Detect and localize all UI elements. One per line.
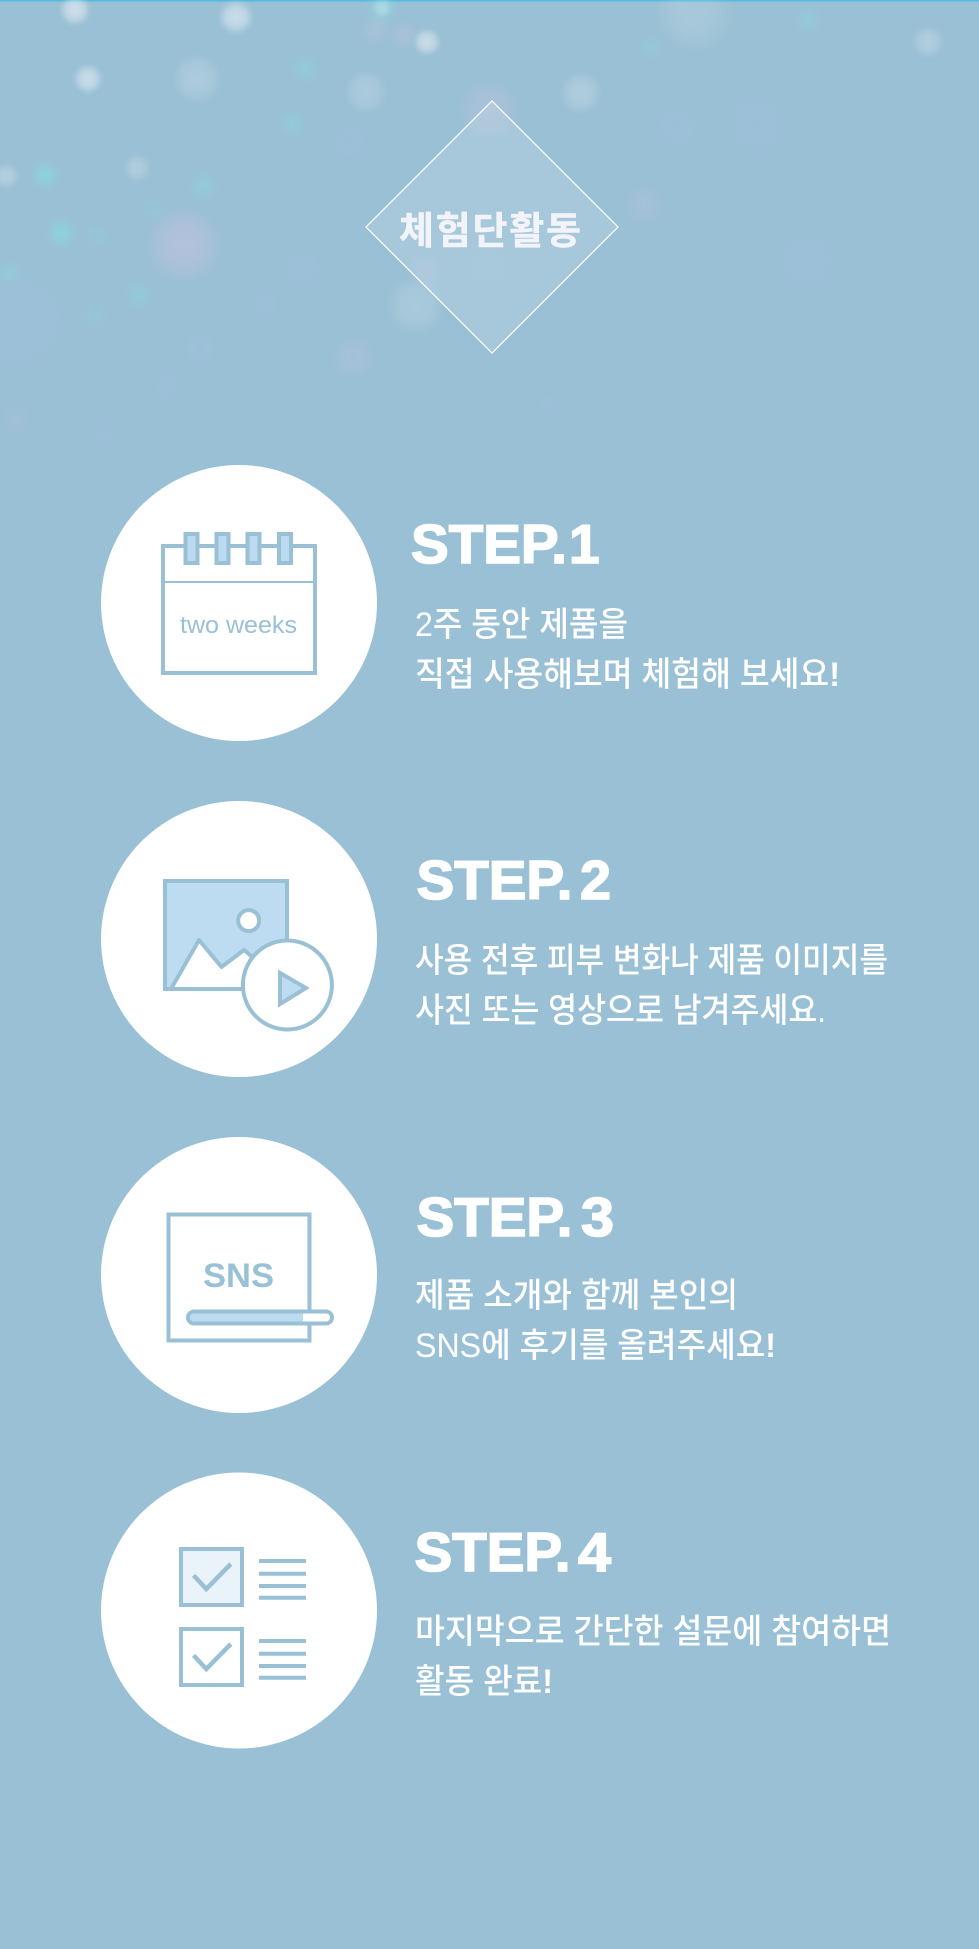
- title badge: diamond: [366, 101, 618, 353]
- step 4 panel: [101, 1472, 891, 1748]
- step 2 panel: [101, 801, 888, 1077]
- step 3 panel: [101, 1137, 776, 1413]
- step 1 text: [415, 606, 840, 694]
- icon: checklist: [181, 1549, 306, 1685]
- step 2 text: [415, 942, 888, 1030]
- step 3 text: 제품 소개와 함께 본인의: [415, 1277, 738, 1315]
- icon: photo and video: [165, 881, 332, 1030]
- step 4 heading: 4: [578, 1521, 611, 1583]
- icon: SNS post: SNS: [203, 1257, 274, 1295]
- step 1 heading: 1: [569, 513, 600, 575]
- icon: calendar: [163, 534, 315, 673]
- circle 3: [101, 1137, 377, 1413]
- step 4 text: [415, 1613, 891, 1701]
- icon: SNS post: [168, 1214, 332, 1340]
- step 4 text: 마지막으로 간단한 설문에 참여하면: [415, 1613, 891, 1651]
- step 3 text: SNS에 후기를 올려주세요!: [415, 1327, 776, 1365]
- step 1 heading: STEP.: [411, 513, 567, 575]
- step 1 text: 직접 사용해보며 체험해 보세요!: [415, 656, 840, 694]
- step 4 heading: STEP.: [414, 1521, 570, 1583]
- title: 체험단활동: [399, 211, 581, 253]
- step 3 heading: 3: [581, 1186, 614, 1248]
- step 3 heading: STEP.: [416, 1186, 572, 1248]
- step 4 text: 활동 완료!: [415, 1663, 553, 1701]
- step 2 text: 사진 또는 영상으로 남겨주세요.: [415, 992, 826, 1030]
- circle 2: [101, 801, 377, 1077]
- step 2 heading: STEP.: [416, 849, 572, 911]
- circle 1: [101, 465, 377, 741]
- step 1 panel: [101, 465, 840, 741]
- step 2 heading: 2: [580, 849, 611, 911]
- icon: calendar: two weeks: [180, 612, 297, 639]
- step 3 text: [415, 1277, 776, 1365]
- step 2 text: 사용 전후 피부 변화나 제품 이미지를: [415, 942, 888, 980]
- step 1 text: 2주 동안 제품을: [415, 606, 628, 644]
- circle 4: [101, 1472, 377, 1748]
- bokeh light background: [0, 0, 944, 450]
